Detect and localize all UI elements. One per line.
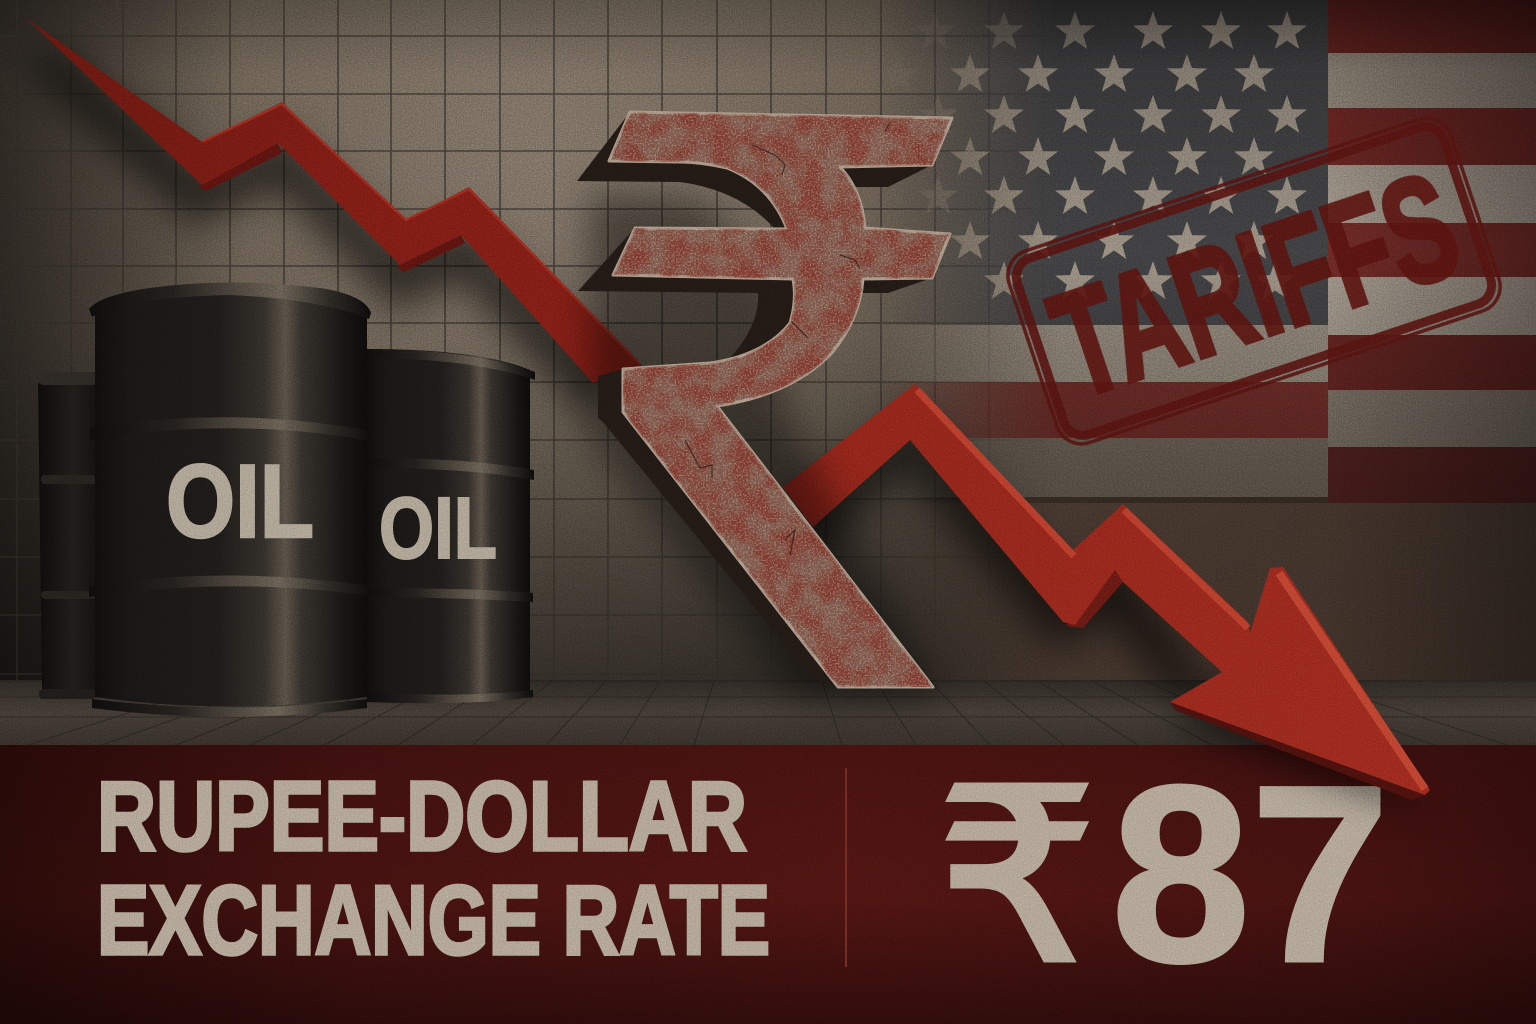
stamp inner border	[1011, 121, 1497, 441]
flag stripes right of canton	[1328, 0, 1536, 680]
rupee symbol shadow	[590, 190, 940, 700]
tariffs stamp	[1001, 111, 1507, 451]
left back barrel	[38, 372, 98, 699]
label: oil large: OIL	[166, 444, 314, 560]
banner title line two: EXCHANGE RATE	[97, 865, 770, 975]
american flag	[860, 0, 1536, 680]
rupee currency sign: ₹	[936, 743, 1098, 1011]
floor	[0, 680, 1536, 745]
rupee stone speckle	[609, 112, 952, 687]
front barrel	[89, 282, 371, 717]
falling arrow lower segment and head	[783, 384, 1430, 800]
rate value: 87	[1111, 734, 1390, 1015]
rupee extrusion	[577, 112, 932, 687]
flag stars	[879, 11, 1307, 299]
banner divider	[845, 768, 847, 967]
large stone rupee symbol	[577, 112, 952, 687]
right barrel	[365, 349, 535, 703]
bottom banner	[0, 734, 1536, 1024]
flag stripes left of canton	[860, 0, 1536, 680]
falling arrow shadows	[20, 50, 1420, 810]
rupee cracks	[685, 122, 890, 555]
background wall	[0, 0, 1536, 745]
banner title line one: RUPEE-DOLLAR	[97, 761, 747, 871]
oil barrels	[38, 282, 535, 717]
rupee face	[609, 112, 952, 687]
label: oil small: OIL	[379, 480, 497, 577]
falling arrow upper segment	[26, 18, 642, 383]
rupee red mottling	[609, 112, 952, 687]
stamp outer border	[1001, 111, 1507, 451]
